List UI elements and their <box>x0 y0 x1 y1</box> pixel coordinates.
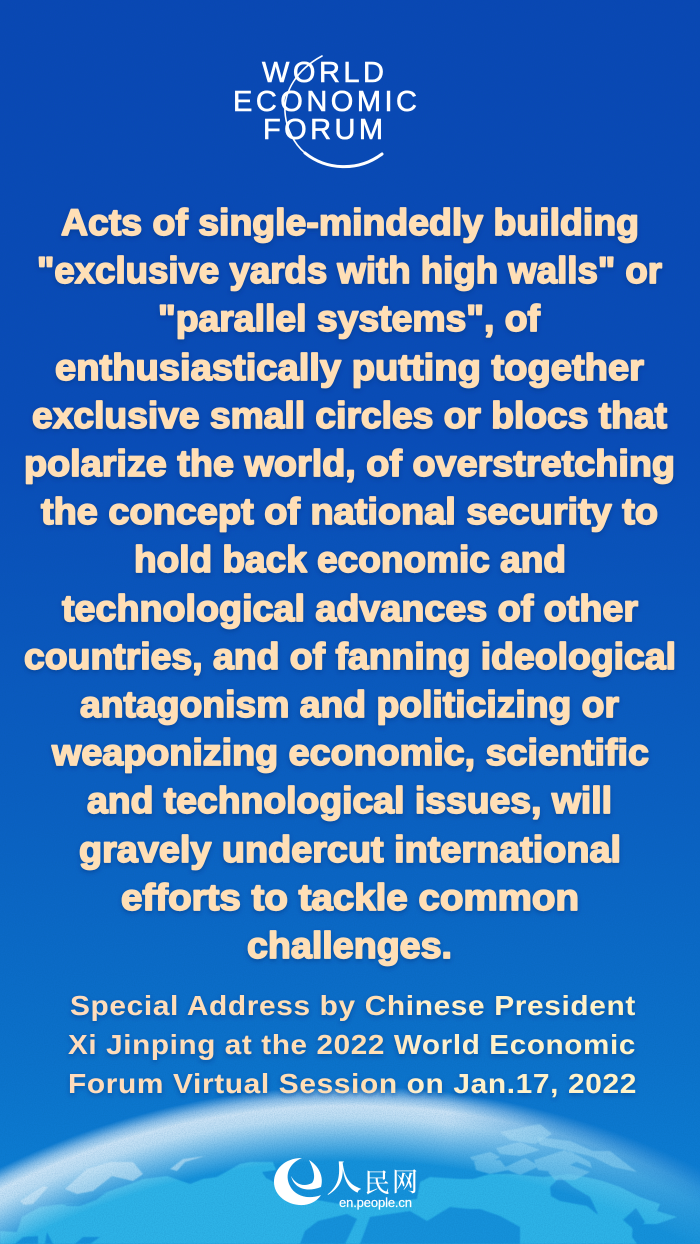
main quote <box>24 202 676 966</box>
main quote: enthusiastically putting together <box>55 347 644 388</box>
main quote: and technological issues, will <box>87 780 612 821</box>
logo wordmark: WORLD <box>262 57 384 89</box>
logo wordmark: FORUM <box>263 114 383 146</box>
ocean <box>0 1085 700 1244</box>
main quote: gravely undercut international <box>79 829 621 870</box>
main quote: technological advances of other <box>62 588 638 629</box>
Greenland <box>537 1137 637 1172</box>
logo wordmark <box>233 57 417 146</box>
land masses <box>0 1162 677 1244</box>
atmosphere rim <box>0 1085 700 1244</box>
wordmark: 人民网: 民 <box>364 1163 390 1200</box>
pale Scandinavia and Britain <box>20 1156 205 1205</box>
main quote: exclusive small circles or blocs that <box>32 395 667 436</box>
pale islands and northern lands <box>470 1124 592 1180</box>
main quote: weaponizing economic, scientific <box>51 732 649 773</box>
wordmark: 人民网: 人 <box>323 1150 363 1203</box>
main quote: hold back economic and <box>134 539 566 580</box>
logo wordmark: ECONOMIC <box>233 86 417 118</box>
attribution: Xi Jinping at the 2022 World Economic <box>68 1029 636 1060</box>
main quote: polarize the world, of overstretching <box>24 443 675 484</box>
main quote: Acts of single-mindedly building <box>61 202 639 243</box>
logo arc <box>285 56 382 167</box>
wordmark: 人民网: 网 <box>392 1162 418 1199</box>
main quote: antagonism and politicizing or <box>80 684 619 725</box>
logo: People's Daily Online <box>274 1150 418 1210</box>
globe <box>0 1085 700 1244</box>
Eurasia and Pacific rim <box>0 1162 677 1244</box>
attribution: Forum Virtual Session on Jan.17, 2022 <box>68 1068 637 1099</box>
wordmark: 人民网 <box>323 1150 418 1203</box>
logo: World Economic Forum <box>233 56 417 167</box>
icon: swirl emblem <box>274 1158 322 1205</box>
main quote: "exclusive yards with high walls" or <box>37 250 662 291</box>
attribution: Special Address by Chinese President <box>70 990 636 1021</box>
main quote: challenges. <box>247 925 452 966</box>
url: en.people.cn: en.people.cn <box>339 1195 412 1210</box>
dark seas over land <box>15 1177 645 1244</box>
main quote: countries, and of fanning ideological <box>24 636 676 677</box>
attribution <box>68 990 637 1099</box>
main quote: "parallel systems", of <box>158 298 541 339</box>
main quote: efforts to tackle common <box>121 877 579 918</box>
main quote: the concept of national security to <box>41 491 658 532</box>
